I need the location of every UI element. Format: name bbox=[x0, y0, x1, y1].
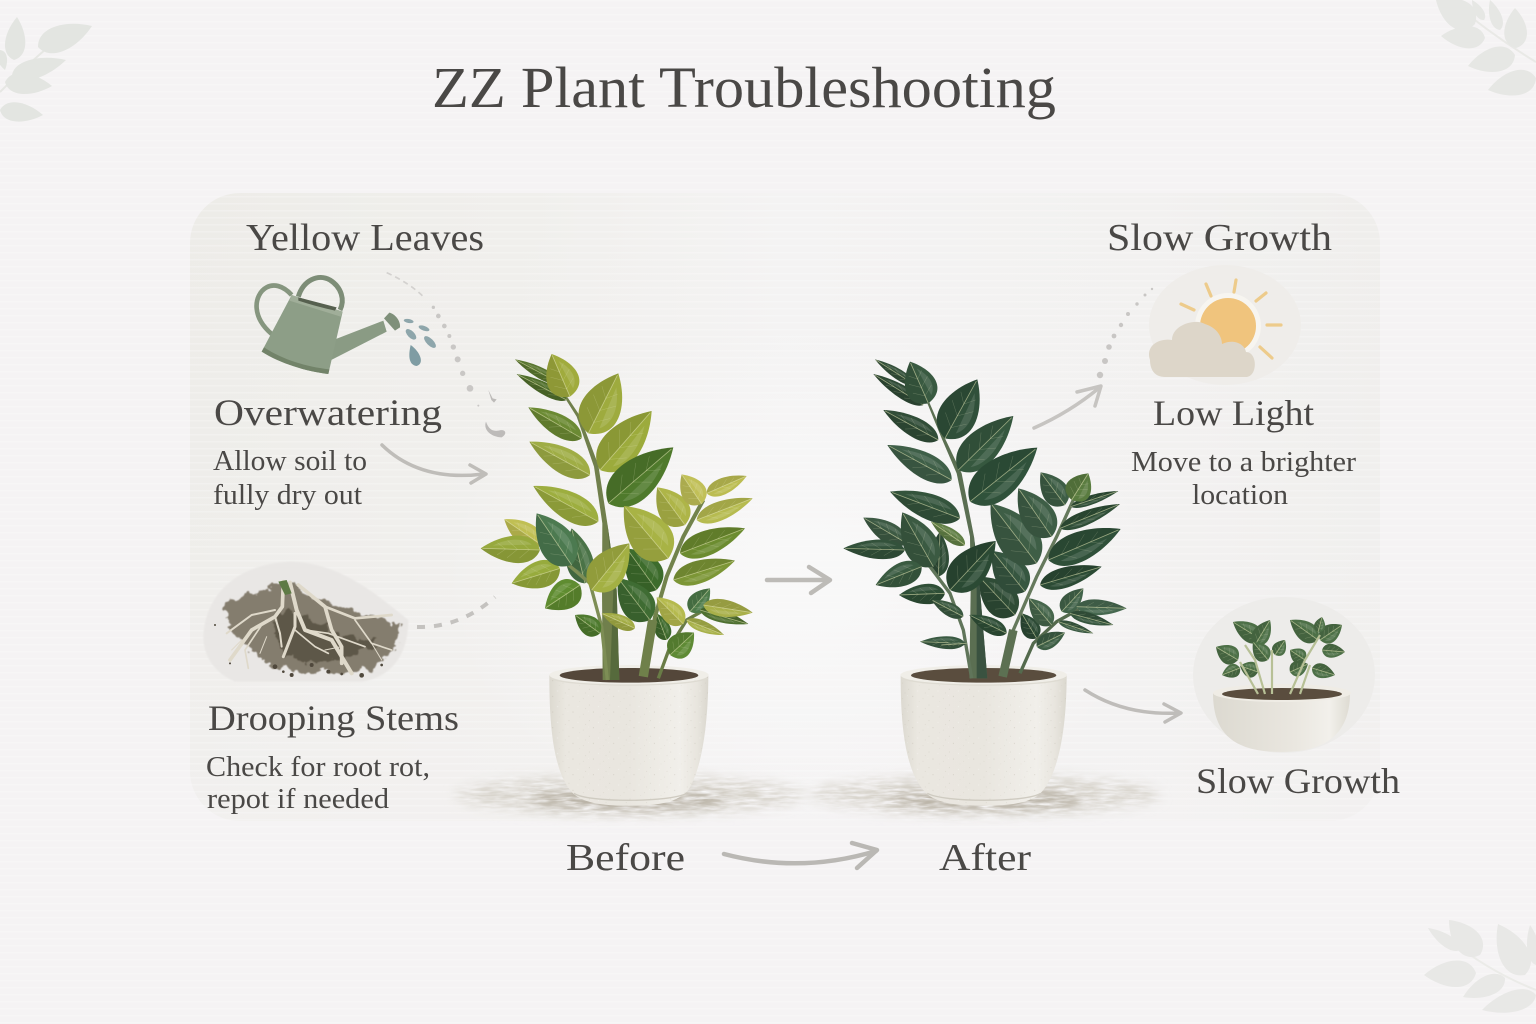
text: drooping stems fix: Check for root rot, bbox=[206, 752, 430, 783]
icon: sun behind cloud bbox=[1149, 265, 1301, 385]
label: before: Before bbox=[566, 837, 685, 879]
stems: before bbox=[542, 385, 710, 680]
plant: after (healthy) bbox=[843, 355, 1127, 806]
pot: before bbox=[549, 665, 709, 806]
plant: before (yellowing) bbox=[480, 348, 756, 806]
text: overwatering fix: Allow soil to bbox=[213, 446, 367, 477]
text: drooping stems fix bbox=[206, 752, 430, 815]
leaves behind stems: after bbox=[927, 516, 1045, 643]
text: drooping stems fix: repot if needed bbox=[207, 784, 389, 815]
arrow: after plant to slow growth bbox=[1085, 690, 1181, 722]
label: after: After bbox=[939, 837, 1031, 879]
icon: watering can bbox=[257, 277, 400, 374]
title: ZZ Plant Troubleshooting bbox=[432, 55, 1056, 120]
corner leaf sprig bottom-right bbox=[1423, 911, 1536, 1020]
arrow: before to after bbox=[724, 843, 877, 868]
label: low light: Low Light bbox=[1153, 393, 1314, 433]
label: overwatering: Overwatering bbox=[214, 393, 442, 434]
label: slow growth bottom: Slow Growth bbox=[1196, 761, 1400, 801]
label: drooping stems: Drooping Stems bbox=[208, 698, 459, 738]
text: overwatering fix: fully dry out bbox=[213, 480, 362, 511]
heading: yellow leaves: Yellow Leaves bbox=[246, 217, 484, 259]
text: overwatering fix bbox=[213, 446, 367, 511]
leaves: before bbox=[480, 348, 756, 664]
text: low light fix: location bbox=[1192, 480, 1288, 511]
panel: soft background card bbox=[190, 193, 1380, 840]
dotted arc from watering can bbox=[387, 273, 505, 437]
text: low light fix: Move to a brighter bbox=[1131, 447, 1357, 478]
arrow: overwatering to plant bbox=[382, 445, 486, 483]
dotted connector to sun bbox=[1097, 288, 1153, 378]
arrow: before to after middle bbox=[767, 567, 830, 593]
corner leaf sprig top-left bbox=[0, 14, 97, 124]
corner leaf sprig top-right bbox=[1428, 0, 1536, 102]
icon: root ball bbox=[203, 562, 408, 682]
dashed connector: root to plant bbox=[417, 597, 495, 627]
stems: after bbox=[908, 399, 1083, 678]
leaves behind stems: before bbox=[559, 525, 674, 643]
heading: slow growth top: Slow Growth bbox=[1107, 217, 1332, 259]
icon: small potted plant bbox=[1193, 597, 1375, 753]
icon: water drops bbox=[403, 318, 438, 366]
pot: after bbox=[900, 665, 1067, 806]
arrow: after plant to low light bbox=[1034, 386, 1101, 428]
leaves: after bbox=[843, 355, 1127, 654]
text: low light fix bbox=[1131, 447, 1357, 511]
ground texture under plants bbox=[455, 775, 1160, 815]
